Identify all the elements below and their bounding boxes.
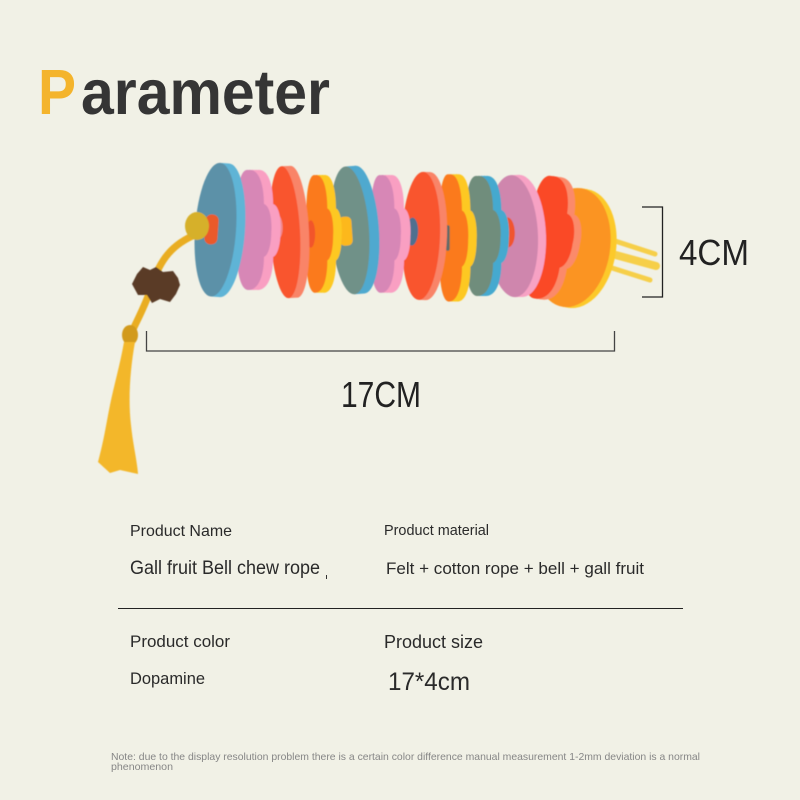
pink felt flower, middle xyxy=(367,175,411,293)
rope tassel xyxy=(98,342,138,474)
blue felt disc, middle xyxy=(327,164,383,296)
pink felt flower, left xyxy=(233,170,281,290)
title: P xyxy=(38,56,76,128)
parameter table xyxy=(118,523,683,696)
red felt flower xyxy=(514,173,589,304)
product name value: Gall fruit Bell chew rope xyxy=(130,558,320,579)
length dimension bracket xyxy=(146,331,614,351)
footnote: Note: due to the display resolution problem there is a certain color difference manual measurement 1-2mm deviation is a normal xyxy=(111,752,700,763)
product size value: 17*4cm xyxy=(388,668,470,696)
orange felt disc xyxy=(525,182,625,314)
pink felt disc xyxy=(486,174,548,298)
red felt disc xyxy=(400,171,449,301)
product material value: Felt + cotton rope + bell + gall fruit xyxy=(386,559,644,578)
green and blue felt flower xyxy=(460,176,509,296)
product name heading: Product Name xyxy=(130,523,232,540)
product size heading: Product size xyxy=(384,632,483,652)
height dimension bracket xyxy=(642,207,662,297)
blue felt disc, front xyxy=(190,161,250,299)
product photo: chew rope toy xyxy=(98,161,656,474)
orange and yellow felt flower xyxy=(436,174,477,302)
red felt disc, left xyxy=(267,165,312,299)
footnote xyxy=(111,752,700,773)
table divider xyxy=(118,608,683,609)
title: arameter xyxy=(81,58,330,128)
footnote: phenomenon xyxy=(111,762,173,773)
product material heading: Product material xyxy=(384,523,489,539)
length label: 17CM xyxy=(341,374,421,415)
product color heading: Product color xyxy=(130,632,230,651)
product color value: Dopamine xyxy=(130,670,205,688)
yellow cotton rope xyxy=(130,212,209,336)
right rope tassel xyxy=(612,240,656,280)
rope knot xyxy=(122,325,138,345)
orange and yellow felt flower, left xyxy=(303,175,342,293)
height label: 4CM xyxy=(679,232,749,273)
brown gall fruit xyxy=(132,267,180,303)
